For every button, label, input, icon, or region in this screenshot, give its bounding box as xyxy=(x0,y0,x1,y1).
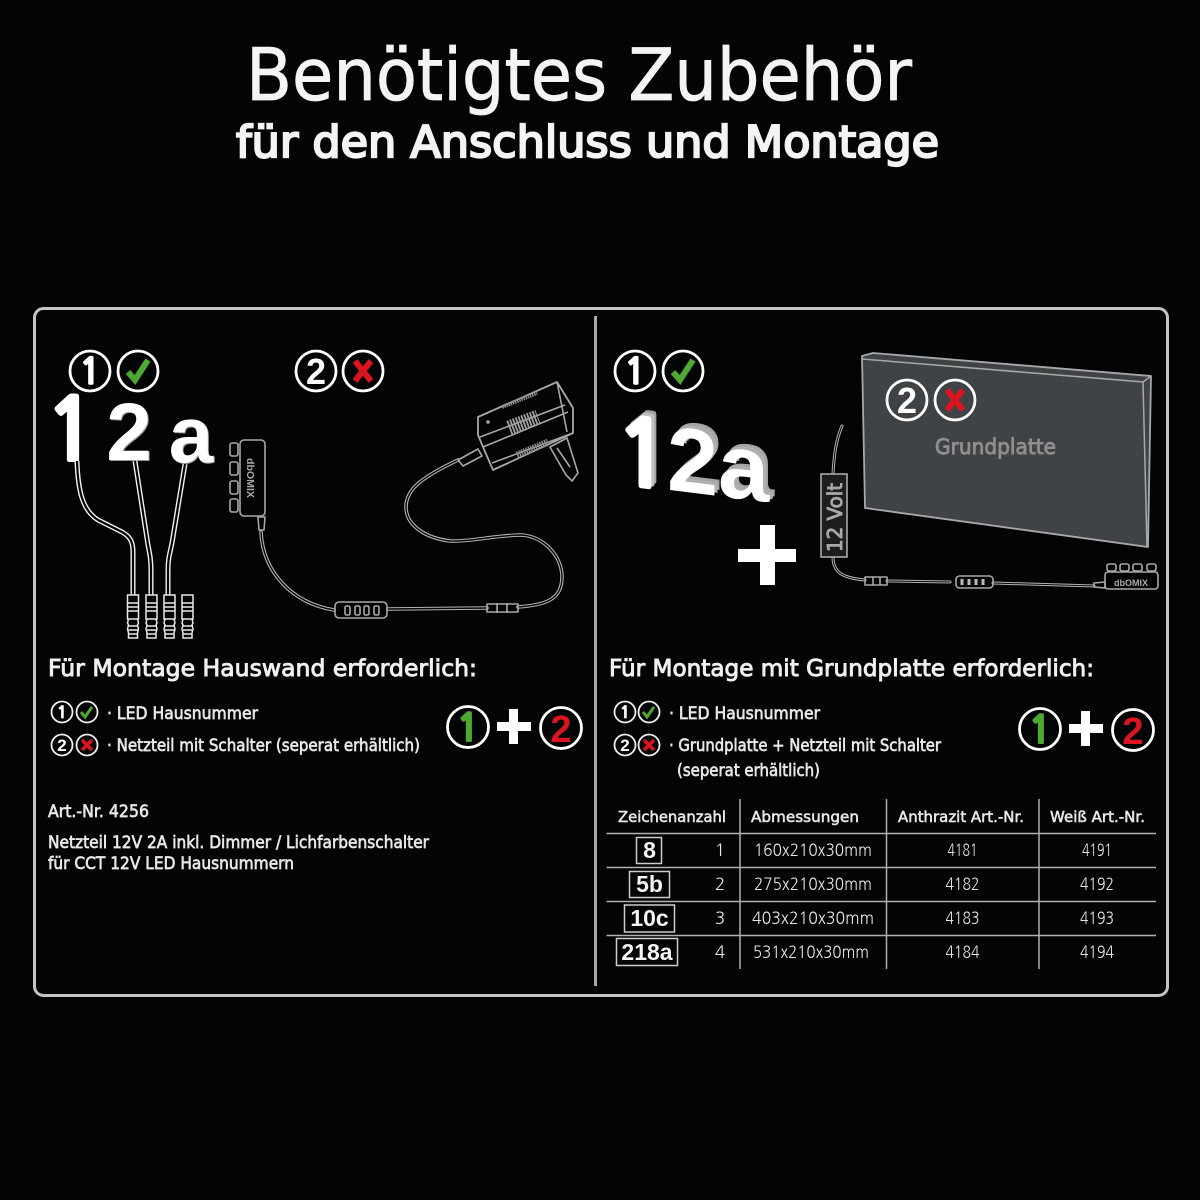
badge: 2 not included xyxy=(296,351,383,392)
house number 12a: 1 xyxy=(615,406,671,504)
formula: 1 + 2 xyxy=(1020,708,1154,753)
legend: Hauswand xyxy=(52,702,420,756)
badge: 2 not included xyxy=(887,380,975,421)
article info: Netzteil 12V 2A inkl. Dimmer / Lichfarbenschalter xyxy=(48,833,429,852)
legend: Hauswand: 1 xyxy=(57,704,67,721)
formula: 1 + 2: 1 xyxy=(1028,711,1052,749)
row 4: 4 xyxy=(715,944,725,961)
house number letters with wires: 2 xyxy=(107,388,153,479)
plug adapter xyxy=(458,382,578,481)
row 3: 403x210x30mm xyxy=(752,910,874,927)
row 3 xyxy=(624,905,1114,932)
formula: 1 + 2 xyxy=(448,706,582,751)
title: Benötigtes Zubehör xyxy=(246,33,912,117)
article info xyxy=(48,802,429,873)
power supply with switch xyxy=(230,382,578,618)
badge: 2 not included: 2 xyxy=(306,351,326,392)
house number letters with wires: 1 xyxy=(45,388,97,473)
power cable with 12 Volt adapter: 12 Volt xyxy=(823,483,847,552)
house number 12a: 2 xyxy=(670,403,721,513)
table: base plate sizes xyxy=(606,799,1156,969)
legend: Grundplatte: 2 xyxy=(620,736,630,755)
table header xyxy=(618,808,1145,826)
row 2: 4182 xyxy=(946,876,980,893)
subtitle: für den Anschluss und Montage xyxy=(236,117,939,168)
house number 12a: 2 xyxy=(672,401,723,510)
legend: Grundplatte: (seperat erhältlich) xyxy=(677,761,820,780)
house number 12a: a xyxy=(721,410,773,520)
row 1 xyxy=(636,837,1112,864)
row 1: 8 xyxy=(643,837,656,863)
row 4: 4184 xyxy=(946,944,980,961)
row 2: 5b xyxy=(636,871,663,897)
row 1: 1 xyxy=(715,842,725,859)
row 4: 218a xyxy=(621,939,673,965)
badge: 1 included: 1 xyxy=(624,355,646,390)
row 2 xyxy=(630,871,1114,898)
badge: 2 not included: 2 xyxy=(897,380,917,421)
badge: 1 included xyxy=(70,351,158,391)
formula: 1 + 2: 2 xyxy=(1122,711,1144,753)
row 1: 160x210x30mm xyxy=(754,842,872,859)
house number letters with wires: 2 xyxy=(106,387,152,478)
legend: Grundplatte: 1 xyxy=(620,704,630,721)
article info: für CCT 12V LED Hausnummern xyxy=(48,854,294,873)
badge: 1 included xyxy=(615,351,703,391)
house number 12a: 2 xyxy=(667,406,718,516)
row 3: 3 xyxy=(715,910,725,927)
table header: Zeichenanzahl xyxy=(618,808,726,826)
base plate xyxy=(862,353,1151,547)
article info: Art.-Nr. 4256 xyxy=(48,802,149,821)
legend: Grundplatte: · LED Hausnummer xyxy=(669,704,820,723)
power supply with switch: dbOMIX xyxy=(244,458,255,498)
row 4 xyxy=(616,938,1114,966)
table header: Anthrazit Art.-Nr. xyxy=(898,808,1024,826)
heading: Hauswand: Für Montage Hauswand erforderlich: xyxy=(48,656,477,682)
badge: 1 included: 1 xyxy=(79,355,101,390)
house number letters with wires xyxy=(45,387,215,638)
base plate: Grundplatte xyxy=(935,435,1056,459)
row 1: 4181 xyxy=(948,842,978,859)
house number 12a: 1 xyxy=(620,400,676,499)
legend: Grundplatte xyxy=(614,702,941,780)
formula: 1 + 2: 2 xyxy=(550,709,572,751)
legend: Hauswand: · LED Hausnummer xyxy=(107,704,258,723)
row 1: 4191 xyxy=(1082,842,1112,859)
panel: Grundplatte xyxy=(606,351,1158,969)
house number 12a: a xyxy=(718,412,770,522)
formula: 1 + 2: 1 xyxy=(456,709,480,747)
plus sign xyxy=(738,525,796,585)
table header: Weiß Art.-Nr. xyxy=(1050,808,1145,826)
house number 12a xyxy=(615,394,775,523)
heading: Grundplatte: Für Montage mit Grundplatte erforderlich: xyxy=(609,656,1094,682)
row 4: 531x210x30mm xyxy=(753,944,869,961)
house number 12a: 1 xyxy=(618,403,674,501)
legend: Hauswand: 2 xyxy=(57,736,67,755)
row 2: 4192 xyxy=(1080,876,1114,893)
house number 12a: a xyxy=(723,407,775,517)
row 3: 4193 xyxy=(1080,910,1114,927)
row 2: 2 xyxy=(715,876,725,893)
house number letters with wires: a xyxy=(169,390,214,479)
legend: Hauswand: · Netzteil mit Schalter (seperat erhältlich) xyxy=(107,736,420,755)
row 3: 10c xyxy=(630,905,669,931)
power cable with 12 Volt adapter: dbOMIX xyxy=(1114,578,1148,588)
legend: Grundplatte: · Grundplatte + Netzteil mit Schalter xyxy=(669,736,941,755)
table header: Abmessungen xyxy=(751,808,859,826)
row 4: 4194 xyxy=(1080,944,1114,961)
house number letters with wires: a xyxy=(170,391,215,480)
power cable with 12 Volt adapter xyxy=(821,426,1158,589)
panel: Hauswand xyxy=(45,351,582,873)
row 3: 4183 xyxy=(946,910,980,927)
panel frame xyxy=(34,308,1168,996)
row 2: 275x210x30mm xyxy=(754,876,872,893)
